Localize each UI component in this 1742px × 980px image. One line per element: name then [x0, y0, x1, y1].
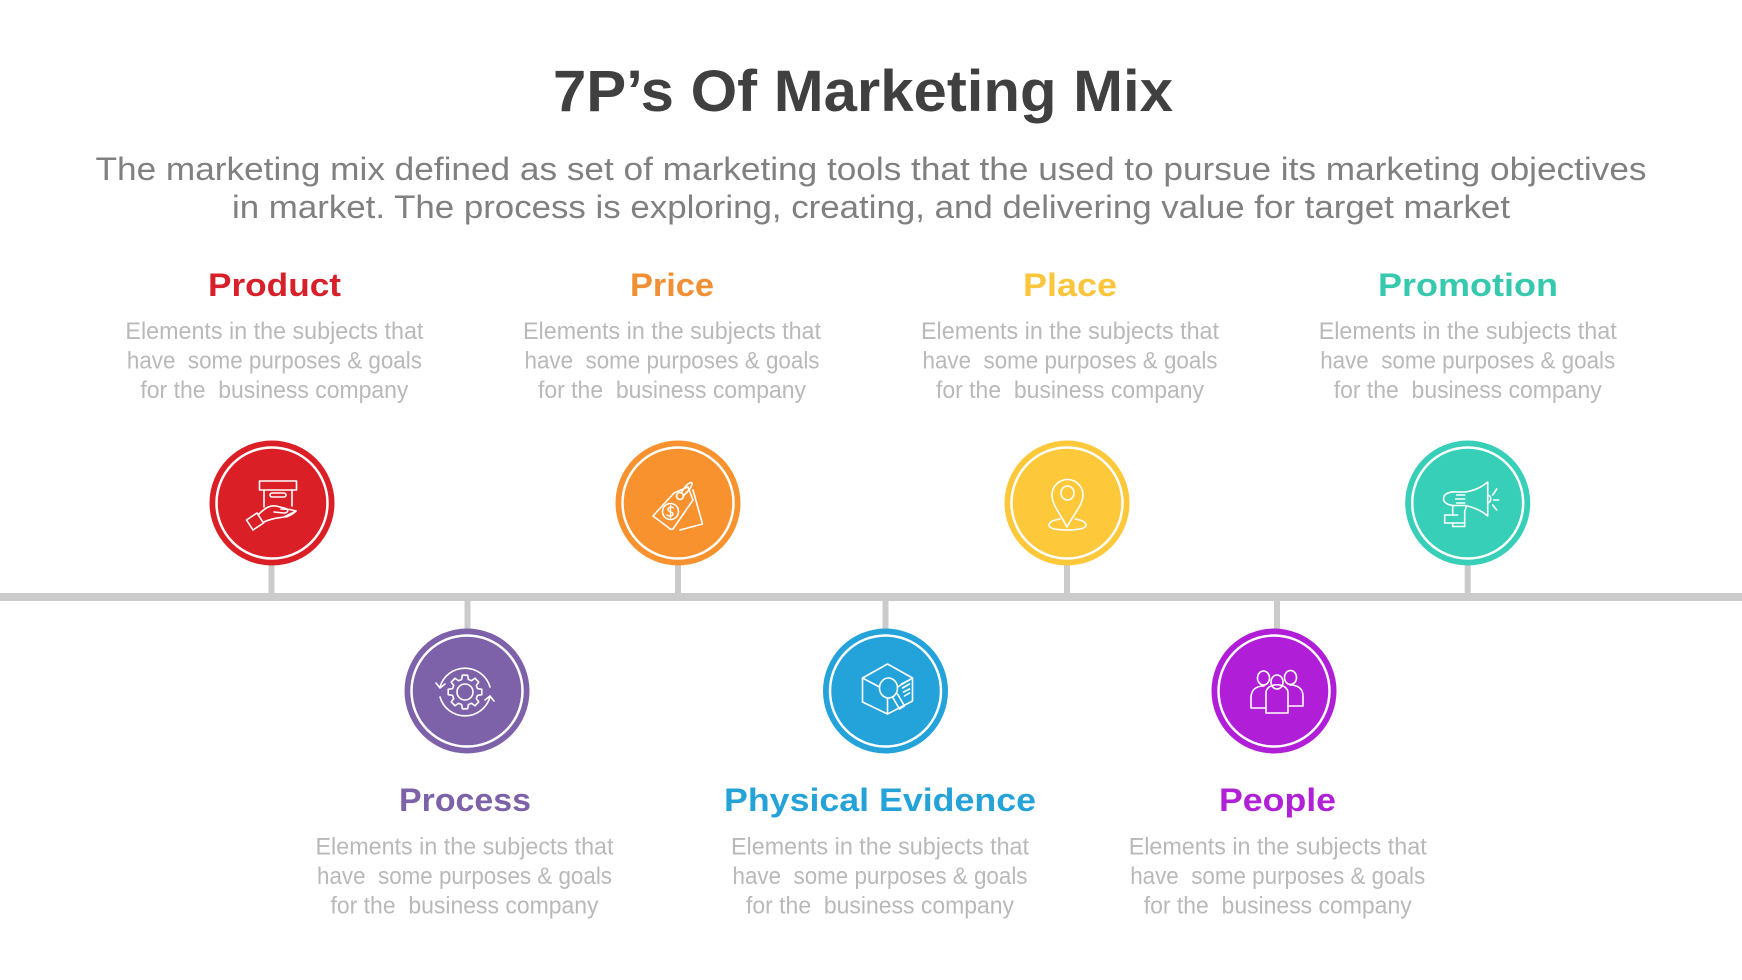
description: Promotion — [1319, 318, 1617, 404]
heading: Process: Process — [399, 782, 531, 818]
description: Product: Elements in the subjects that — [125, 318, 424, 345]
panel: Process — [316, 628, 614, 920]
icon: group of people — [1212, 628, 1336, 754]
subtitle: The marketing mix defined as set of marketing tools that the used to pursue its marketing objectives — [96, 151, 1646, 187]
icon: hand holding box — [210, 440, 334, 566]
subtitle: in market. The process is exploring, creating, and delivering value for target market — [232, 189, 1510, 225]
heading: People: People — [1219, 782, 1336, 818]
icon: megaphone — [1405, 440, 1530, 566]
description: Price — [523, 318, 821, 404]
description: Physical Evidence: have some purposes & goals — [732, 863, 1028, 890]
description: Place: for the business company — [936, 377, 1204, 404]
heading: Physical Evidence: Physical Evidence — [724, 782, 1036, 818]
description: People: have some purposes & goals — [1130, 863, 1425, 890]
icon: location pin — [1004, 440, 1130, 566]
description: Promotion: for the business company — [1334, 377, 1602, 404]
description: Process: have some purposes & goals — [317, 863, 612, 890]
heading: Place: Place — [1023, 267, 1117, 303]
description: Price: for the business company — [538, 377, 806, 404]
icon: gear with cycle arrows — [404, 628, 530, 754]
description: Price: have some purposes & goals — [524, 348, 820, 374]
description: Promotion: Elements in the subjects that — [1319, 318, 1617, 345]
heading: Promotion: Promotion — [1378, 267, 1558, 303]
description: Product: for the business company — [140, 377, 408, 404]
description: Price: Elements in the subjects that — [523, 318, 821, 345]
subtitle — [96, 151, 1646, 225]
description: Place: have some purposes & goals — [922, 348, 1218, 374]
icon: cube with magnifier — [823, 628, 948, 754]
description: Place — [921, 318, 1219, 404]
description: Process — [316, 834, 614, 920]
icon: price tags — [616, 440, 740, 566]
heading: Product: Product — [208, 267, 341, 303]
description: Physical Evidence: for the business company — [746, 892, 1014, 920]
description: Physical Evidence — [731, 834, 1029, 920]
panel: Physical Evidence — [724, 628, 1036, 920]
description: Product — [125, 318, 424, 404]
description: Promotion: have some purposes & goals — [1320, 348, 1615, 374]
description: People: Elements in the subjects that — [1129, 834, 1427, 860]
description: People: for the business company — [1144, 892, 1412, 920]
description: Product: have some purposes & goals — [127, 348, 422, 374]
heading: Price: Price — [630, 267, 714, 303]
panel: Place — [921, 267, 1219, 566]
panel: Price — [523, 267, 821, 566]
description: Place: Elements in the subjects that — [921, 318, 1219, 345]
panel: Product — [125, 267, 424, 566]
panel: People — [1129, 628, 1427, 920]
description: Physical Evidence: Elements in the subjects that — [731, 834, 1029, 860]
description: People — [1129, 834, 1427, 920]
description: Process: for the business company — [330, 892, 598, 920]
title: 7P’s Of Marketing Mix — [553, 59, 1173, 124]
timeline axis — [0, 560, 1742, 633]
panel: Promotion — [1319, 267, 1617, 566]
description: Process: Elements in the subjects that — [316, 834, 614, 860]
